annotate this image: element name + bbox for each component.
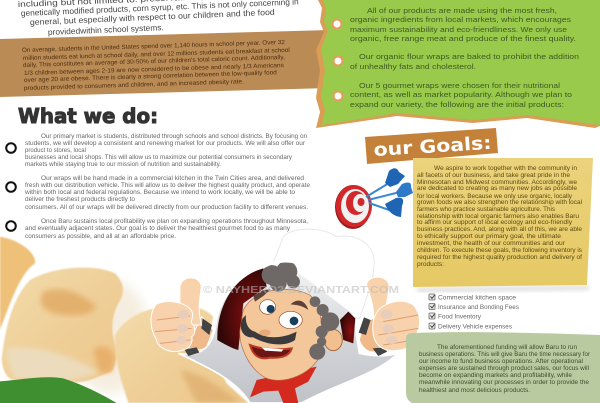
eyebrows <box>253 289 308 310</box>
what we do text: Our wraps will be hand made in a commercial kitchen in the Twin Cities area, and delivered <box>41 175 305 182</box>
goals text: Minnesotan and Midwest communities. Accordingly, we <box>417 179 578 186</box>
wrap: middle <box>2 268 123 382</box>
goals text: products: <box>417 261 444 268</box>
statistics text: million students eat lunch at school daily, and over 12 millions students eat breakfast at school <box>23 47 290 62</box>
what we do text: within both local and federal regulations. Because we intend to work locally, we will be able to <box>24 189 296 196</box>
goals text: children. To execute these goals, the following inventory is <box>417 247 582 254</box>
what we do text: Once Baru sustains local profitability we plan on expanding operations throughout Minnesota, <box>41 218 308 225</box>
wrap: right <box>115 306 248 403</box>
products text: content, as well as market popularity. Although we plan to <box>350 90 572 99</box>
panel: products <box>316 0 600 128</box>
leaf <box>0 377 117 403</box>
products text: organic ingredients from local markets, which encourages <box>350 15 571 24</box>
funding text: The aforementioned funding will allow Baru to run <box>437 344 577 351</box>
soft shadow behind wraps <box>70 280 150 393</box>
statistics text: products provided to consumers and children, and an increased obesity rate. <box>24 78 244 92</box>
funding text: business operations. This will give Baru the time necessary for <box>419 351 591 358</box>
chef hat <box>267 229 374 318</box>
products text: expand our variety, the following are the initial products: <box>350 100 564 109</box>
funding text: our income to fund business operations. After operational <box>419 358 583 365</box>
chef jacket <box>178 263 398 403</box>
goals text: all facets of our business, and take great pride in the <box>417 172 571 179</box>
what we do text: businesses and local shops. This will allow us to maximize our potential consumers in secondary <box>25 154 293 161</box>
intro text <box>18 0 299 37</box>
bullet: expansion <box>6 221 16 231</box>
what we do text: fresh with our distribution vehicle. This will allow us to deliver the highest quality product, and operate <box>25 182 311 189</box>
what we do text: deliver the freshest products directly to <box>25 196 135 203</box>
hair <box>262 261 339 360</box>
wrap: left <box>0 237 35 330</box>
face <box>240 289 323 380</box>
statistics text: daily. This constitutes an average of 30-50% of our children's total caloric count. Additionally, <box>23 54 285 69</box>
what we do text: consumers as possible, and all at an affordable price. <box>25 233 176 240</box>
goals text: investment, the health of our communities and our <box>417 240 565 247</box>
what we do text <box>24 133 311 240</box>
goals text: grown foods we also strengthen the relationship with local <box>417 199 582 206</box>
intro text: general, but especially with respect to our children and the food <box>30 8 275 27</box>
goals text: to ethically support our primary goal, the ultimate <box>417 233 562 240</box>
what we do text: consumers. All of our wraps will be delivered directly from our production facility to different venues. <box>25 204 308 211</box>
panel: statistics band <box>0 30 330 97</box>
ear <box>324 329 342 351</box>
hat brim <box>263 262 317 273</box>
right hand <box>359 277 420 356</box>
goals text: to affirm our support of local ecology and eco-friendly <box>417 219 573 226</box>
bullet: market <box>6 143 16 153</box>
products text: Our organic flour wraps are baked to prohibit the addition <box>359 52 579 61</box>
goals text: farmers who practice sustainable agriculture. This <box>417 206 555 213</box>
nose <box>259 329 271 336</box>
bullet: products 3 <box>334 92 342 100</box>
watermark: © NAYHERO2.DEVIANTART.COM <box>203 284 399 296</box>
icon: target with darts <box>335 168 413 229</box>
mouth <box>250 345 292 358</box>
statistics text: over age 20 are obese. There is clearly a strong correlation between the low-quality food <box>24 69 277 84</box>
mascot: chef <box>151 229 420 403</box>
funding text: healthiest and most delicious products. <box>419 387 530 394</box>
products text: of unhealthy fats and cholesterol. <box>350 62 476 71</box>
what we do text: product to stores, local <box>25 147 86 154</box>
goals text: are dedicated to creating as many new jobs as possible <box>417 185 578 192</box>
goals text: relationship with local organic farmers also enables Baru <box>417 213 579 220</box>
goals banner <box>365 128 498 164</box>
goals text: for local workers. Because we only use organic, locally <box>417 193 573 200</box>
products text: Our 5 gourmet wraps were chosen for their nutritional <box>359 81 560 90</box>
bullet: production <box>6 182 16 192</box>
funding text <box>419 344 591 394</box>
funding text: meanwhile innovating our processes in order to provide the <box>419 379 589 386</box>
checklist: Delivery Vehicle expenses <box>438 324 513 330</box>
statistics text <box>22 39 290 92</box>
intro text: providedwithin school systems. <box>48 23 164 37</box>
goals text: business practices. And, along with all of this, we are able <box>417 226 582 233</box>
dark opening right <box>340 312 355 343</box>
goals text: required for the highest quality production and delivery of <box>417 254 582 261</box>
eyes <box>260 300 302 329</box>
what we do text: students, we will develop a consistent and renewing market for our products. We will also offer our <box>25 140 305 147</box>
heading: our goals: our Goals: <box>373 133 492 161</box>
mustache <box>241 315 297 344</box>
dark opening left <box>217 268 267 350</box>
bullet: products 1 <box>332 20 342 28</box>
left hand <box>151 278 213 356</box>
what we do text: markets while staying true to our mission of nutrition and sustainability. <box>25 161 221 168</box>
checklist <box>429 294 520 330</box>
goals text: We aspire to work together with the community in <box>434 165 578 172</box>
heading: our goals <box>365 128 498 164</box>
products text: maximum sustainability and eco-friendliness. We only use <box>350 25 567 34</box>
bullet: products 2 <box>334 56 342 66</box>
what we do text: Our primary market is students, distributed through schools and school districts. By focusing on <box>41 133 307 140</box>
what we do text: and eventually adjacent states. Our goal is to deliver the healthiest gourmet food to as many <box>25 225 291 232</box>
checklist: Insurance and Bonding Fees <box>438 304 520 311</box>
statistics text: On average, students in the United States spend over 1,140 hours in school per year. Over 32 <box>22 39 286 54</box>
heading: what we do: What we do: <box>18 104 158 128</box>
statistics text: 1/3 children between ages 2-19 are now considered to be obese and nearly 1/3 Americans <box>24 62 284 77</box>
funding text: expenses are sustained through product sales, our focus will <box>419 365 589 372</box>
scarf <box>250 367 317 403</box>
products text: All of our products are made using the most fresh, <box>367 6 557 15</box>
products text: organic, free range meat and produce of the finest quality. <box>350 34 576 43</box>
checklist: Food Inventory <box>438 314 482 320</box>
photo: wraps <box>0 237 248 403</box>
panel: goals <box>413 158 593 292</box>
products text <box>350 6 579 109</box>
panel: what we do <box>6 133 311 240</box>
funding text: become on expanding markets and profitability, while <box>419 372 572 379</box>
checklist: Commercial kitchen space <box>438 294 516 302</box>
toasted patches <box>41 289 97 315</box>
panel: funding <box>406 332 600 403</box>
goals text <box>417 165 582 268</box>
